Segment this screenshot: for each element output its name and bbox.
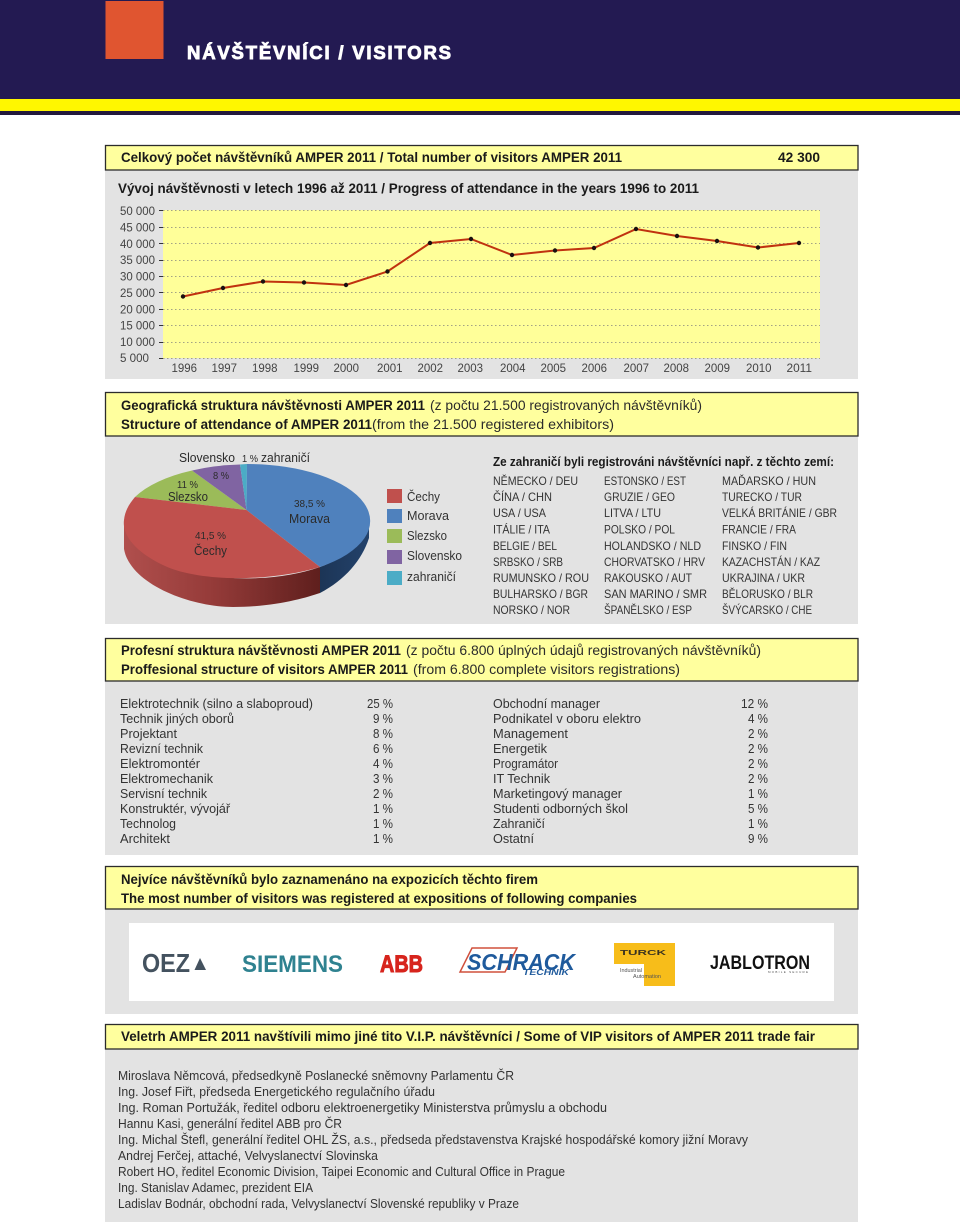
- legend: [387, 489, 462, 585]
- VIP list: Miroslava Němcová, předsedkyně Poslanecké sněmovny Parlamentu ČR: [118, 1068, 514, 1083]
- VIP list: Ing. Stanislav Adamec, prezident EIA: [118, 1180, 313, 1195]
- foreign countries list: KAZACHSTÁN / KAZ: [722, 554, 820, 569]
- line chart: attendance 1996 to 2011: 2003: [458, 361, 483, 375]
- line chart: attendance 1996 to 2011: 1999: [294, 361, 319, 375]
- line chart: attendance 1996 to 2011: 50 000: [120, 204, 155, 218]
- pie chart: visitor regions: Čechy: [194, 543, 227, 558]
- professions list: left column: 3 %: [373, 771, 393, 786]
- foreign countries list: ESTONSKO / EST: [604, 474, 687, 488]
- VIP list: Ing. Michal Štefl, generální ředitel OHL ŽS, a.s., předseda představenstva Krajské hospodářské komory jižní Moravy: [118, 1132, 748, 1147]
- logo: Schrack: SCHRACK: [467, 949, 576, 975]
- foreign countries list: NĚMECKO / DEU: [493, 473, 578, 488]
- professions list: left column: 8 %: [373, 726, 393, 741]
- legend: zahraničí: [407, 569, 456, 584]
- line chart: attendance 1996 to 2011: 1998: [252, 361, 278, 375]
- pie chart: visitor regions: [124, 450, 370, 607]
- foreign countries list: BELGIE / BEL: [493, 539, 557, 553]
- heading: total visitors: Celkový počet návštěvníků AMPER 2011 / Total number of visitors AMPER 2011: [121, 150, 622, 165]
- line chart: attendance 1996 to 2011: 1997: [212, 361, 237, 375]
- professions list: right column: 5 %: [748, 801, 768, 816]
- pie chart: visitor regions: 1 %: [242, 454, 258, 465]
- legend: Slovensko: [407, 548, 462, 563]
- foreign countries list: POLSKO / POL: [604, 522, 675, 536]
- line chart: attendance 1996 to 2011: 2005: [540, 361, 566, 375]
- professions list: left column: 1 %: [373, 801, 393, 816]
- logo: Schrack: TECHNIK: [523, 968, 571, 977]
- foreign countries list: HOLANDSKO / NLD: [604, 539, 701, 553]
- logo: Turck: Automation: [633, 974, 661, 980]
- professions list: right column: 9 %: [748, 831, 768, 846]
- professions list: left column: Elektrotechnik (silno a slaboproud): [120, 696, 313, 711]
- VIP list: Ing. Roman Portužák, ředitel odboru elektroenergetiky Ministerstva průmyslu a obchodu: [118, 1100, 607, 1115]
- heading: professional structure: [106, 638, 858, 681]
- line chart: attendance 1996 to 2011: 30 000: [120, 270, 155, 284]
- logo: ABB: ABB: [380, 951, 423, 978]
- foreign countries list: ITÁLIE / ITA: [493, 522, 550, 536]
- foreign countries list: RAKOUSKO / AUT: [604, 571, 693, 585]
- heading: geographic structure: [106, 392, 858, 436]
- professions list: left column: 1 %: [373, 816, 393, 831]
- line chart: attendance 1996 to 2011: 15 000: [120, 318, 155, 332]
- logo: Turck: Industrial: [620, 968, 642, 974]
- professions list: right column: 2 %: [748, 756, 768, 771]
- professions list: right column: Podnikatel v oboru elektro: [493, 711, 641, 726]
- heading: professional structure: Proffesional structure of visitors AMPER 2011: [121, 662, 408, 677]
- professions list: left column: 25 %: [367, 696, 393, 711]
- heading: geographic structure: (from the 21.500 registered exhibitors): [372, 417, 614, 432]
- line chart: attendance 1996 to 2011: 2008: [664, 361, 689, 375]
- professions list: right column: Management: [493, 726, 568, 741]
- line chart: attendance 1996 to 2011: 35 000: [120, 253, 155, 267]
- professions list: left column: 1 %: [373, 831, 393, 846]
- line chart: attendance 1996 to 2011: 45 000: [120, 220, 155, 234]
- professions list: right column: 2 %: [748, 741, 768, 756]
- professions list: left column: [120, 696, 393, 846]
- pie chart: visitor regions: Slovensko: [179, 450, 235, 465]
- foreign countries list: TURECKO / TUR: [722, 490, 802, 504]
- heading: companies: Nejvíce návštěvníků bylo zaznamenáno na expozicích těchto firem: [121, 872, 538, 887]
- line chart: attendance 1996 to 2011: 10 000: [120, 335, 155, 349]
- professions list: right column: Ostatní: [493, 831, 534, 846]
- pie chart: visitor regions: 41,5 %: [195, 530, 226, 542]
- professions list: right column: 4 %: [748, 711, 768, 726]
- logo: Siemens: SIEMENS: [242, 951, 343, 978]
- VIP list: Hannu Kasi, generální ředitel ABB pro ČR: [118, 1116, 342, 1131]
- VIP list: [118, 1068, 748, 1211]
- line chart: attendance 1996 to 2011: 1996: [172, 361, 197, 375]
- legend: Slezsko: [407, 528, 447, 543]
- professions list: right column: Studenti odborných škol: [493, 801, 628, 816]
- heading: professional structure: Profesní struktura návštěvnosti AMPER 2011: [121, 643, 401, 658]
- foreign countries list: [493, 455, 837, 617]
- line chart: attendance 1996 to 2011: 2010: [746, 361, 772, 375]
- line chart: attendance 1996 to 2011: 2000: [334, 361, 359, 375]
- professions list: left column: Servisní technik: [120, 786, 207, 801]
- line chart: attendance 1996 to 2011: 2011: [786, 361, 812, 375]
- professions list: right column: 12 %: [741, 696, 768, 711]
- panel: VIP visitors: [105, 1024, 858, 1222]
- foreign countries list: FRANCIE / FRA: [722, 522, 796, 536]
- panel: companies: [105, 866, 858, 1014]
- heading: geographic structure: Structure of attendance of AMPER 2011: [121, 417, 372, 432]
- foreign countries list: VELKÁ BRITÁNIE / GBR: [722, 505, 837, 520]
- line chart: attendance 1996 to 2011: 2009: [704, 361, 730, 375]
- professions list: left column: 9 %: [373, 711, 393, 726]
- pie chart: visitor regions: Slezsko: [168, 489, 208, 504]
- professions list: right column: [493, 696, 768, 846]
- foreign countries list: GRUZIE / GEO: [604, 490, 675, 504]
- foreign countries list: FINSKO / FIN: [722, 539, 787, 553]
- professions list: left column: Architekt: [120, 831, 170, 846]
- line chart: attendance 1996 to 2011: [120, 204, 820, 375]
- professions list: right column: 2 %: [748, 726, 768, 741]
- professions list: right column: 2 %: [748, 771, 768, 786]
- professions list: left column: 4 %: [373, 756, 393, 771]
- professions list: left column: Technik jiných oborů: [120, 711, 234, 726]
- chart heading: Vývoj návštěvnosti v letech 1996 až 2011 / Progress of attendance in the years 1996 to 2011: [118, 181, 699, 196]
- line chart: attendance 1996 to 2011: 40 000: [120, 237, 155, 251]
- professions list: left column: Elektromechanik: [120, 771, 213, 786]
- logo strip: [129, 923, 834, 1001]
- professions list: left column: Technolog: [120, 816, 176, 831]
- professions list: right column: Marketingový manager: [493, 786, 623, 801]
- foreign countries list: BULHARSKO / BGR: [493, 587, 588, 601]
- professions list: left column: 2 %: [373, 786, 393, 801]
- line chart: attendance 1996 to 2011: 5 000: [120, 351, 149, 365]
- foreign countries list: CHORVATSKO / HRV: [604, 555, 705, 569]
- professions list: left column: Elektromontér: [120, 756, 201, 771]
- foreign countries list: MAĎARSKO / HUN: [722, 473, 816, 488]
- professions list: right column: 1 %: [748, 816, 768, 831]
- header band: [0, 0, 960, 115]
- pie chart: visitor regions: 11 %: [177, 479, 198, 491]
- heading: total visitors: 42 300: [778, 150, 820, 165]
- professions list: right column: Energetik: [493, 741, 547, 756]
- foreign countries list: ČÍNA / CHN: [493, 489, 552, 504]
- icon: orange square: [106, 1, 164, 59]
- VIP list: Robert HO, ředitel Economic Division, Taipei Economic and Cultural Office in Prague: [118, 1164, 565, 1179]
- title: NÁVŠTĚVNÍCI / VISITORS: [187, 42, 451, 63]
- pie chart: visitor regions: 8 %: [213, 470, 229, 482]
- professions list: left column: Revizní technik: [120, 741, 203, 756]
- line chart: attendance 1996 to 2011: 2004: [500, 361, 526, 375]
- panel: geographic structure: [105, 392, 858, 624]
- heading: companies: The most number of visitors was registered at expositions of following companies: [121, 891, 637, 906]
- foreign countries list: BĚLORUSKO / BLR: [722, 586, 813, 601]
- VIP list: Andrej Ferčej, attaché, Velvyslanectví Slovinska: [118, 1148, 379, 1163]
- heading: geographic structure: Geografická struktura návštěvnosti AMPER 2011: [121, 398, 425, 413]
- heading: geographic structure: (z počtu 21.500 registrovaných návštěvníků): [430, 398, 702, 413]
- professions list: right column: Zahraničí: [493, 816, 545, 831]
- heading: total visitors: [106, 146, 858, 170]
- logo: Jablotron: JABLOTRON: [710, 953, 810, 974]
- professions list: right column: Programátor: [493, 756, 559, 771]
- professions list: left column: Projektant: [120, 726, 177, 741]
- pie chart: visitor regions: 38,5 %: [294, 498, 325, 510]
- line chart: attendance 1996 to 2011: 20 000: [120, 302, 155, 316]
- foreign countries list: ŠPANĚLSKO / ESP: [604, 602, 692, 617]
- foreign countries list: Ze zahraničí byli registrováni návštěvníci např. z těchto zemí:: [493, 455, 834, 469]
- professions list: left column: Konstruktér, vývojář: [120, 801, 231, 816]
- heading: companies: [106, 866, 858, 909]
- foreign countries list: USA / USA: [493, 506, 546, 520]
- foreign countries list: SAN MARINO / SMR: [604, 587, 707, 601]
- panel: total visitors and attendance chart: [105, 146, 858, 379]
- line chart: attendance 1996 to 2011: 25 000: [120, 286, 155, 300]
- VIP list: Ing. Josef Fiřt, předseda Energetického regulačního úřadu: [118, 1084, 435, 1099]
- heading: professional structure: (from 6.800 complete visitors registrations): [413, 662, 680, 677]
- line chart: attendance 1996 to 2011: 2007: [624, 361, 649, 375]
- professions list: left column: 6 %: [373, 741, 393, 756]
- panel: professional structure: [105, 638, 858, 855]
- heading: professional structure: (z počtu 6.800 úplných údajů registrovaných návštěvníků): [406, 643, 761, 658]
- legend: Čechy: [407, 489, 440, 504]
- pie chart: visitor regions: Morava: [289, 511, 331, 526]
- foreign countries list: ŠVÝCARSKO / CHE: [722, 602, 812, 617]
- professions list: right column: Obchodní manager: [493, 696, 601, 711]
- line chart: attendance 1996 to 2011: 2006: [582, 361, 607, 375]
- logo: OEZ: OEZ: [142, 948, 190, 978]
- foreign countries list: SRBSKO / SRB: [493, 555, 563, 569]
- foreign countries list: NORSKO / NOR: [493, 603, 570, 617]
- logo: Turck: [614, 943, 675, 986]
- foreign countries list: LITVA / LTU: [604, 506, 661, 520]
- foreign countries list: RUMUNSKO / ROU: [493, 571, 589, 585]
- line chart: attendance 1996 to 2011: 2001: [377, 361, 403, 375]
- professions list: right column: IT Technik: [493, 771, 550, 786]
- heading: VIP visitors: Veletrh AMPER 2011 navštívili mimo jiné tito V.I.P. návštěvníci / Some of VIP visitors of AMPER 2011 trade fair: [121, 1029, 816, 1044]
- heading: VIP visitors: [106, 1024, 858, 1049]
- professions list: right column: 1 %: [748, 786, 768, 801]
- legend: Morava: [407, 508, 450, 523]
- foreign countries list: UKRAJINA / UKR: [722, 571, 805, 585]
- line chart: attendance 1996 to 2011: 2002: [418, 361, 443, 375]
- pie chart: visitor regions: zahraničí: [261, 450, 310, 465]
- logo: Jablotron: MOBILE SECURE: [768, 970, 808, 974]
- logo: Turck: TURCK: [620, 950, 666, 957]
- VIP list: Ladislav Bodnár, obchodní rada, Velvyslanectví Slovenské republiky v Praze: [118, 1196, 519, 1211]
